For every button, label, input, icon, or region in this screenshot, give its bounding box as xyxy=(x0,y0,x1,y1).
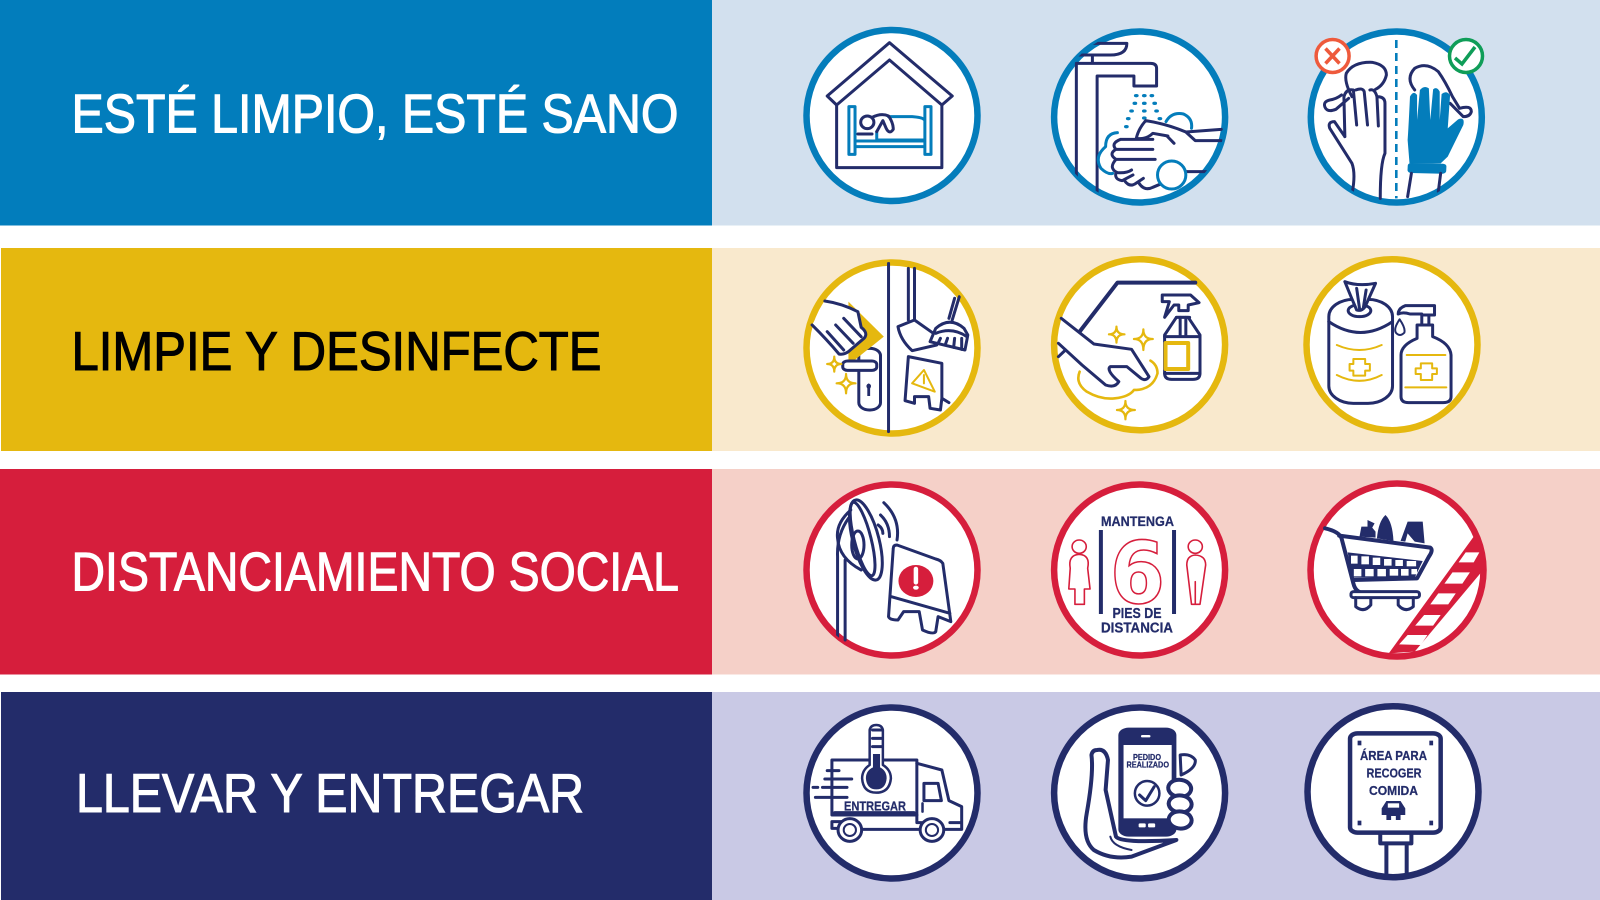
band: blue heading background xyxy=(0,0,712,226)
icon: loudspeaker and warning sign xyxy=(806,484,978,656)
label: mantenga: MANTENGA xyxy=(1101,513,1174,529)
icon: hand washing at tap xyxy=(1054,32,1225,202)
icon: keep six feet apart xyxy=(1054,484,1225,656)
icon: wiping a surface with spray bottle xyxy=(1054,259,1225,430)
band: gold heading background xyxy=(1,248,712,451)
band: pale indigo icon background xyxy=(712,692,1600,900)
heading: distanciamiento social: DISTANCIAMIENTO SOCIAL xyxy=(72,541,679,603)
icon: sick person in bed at home xyxy=(806,30,978,201)
label: area para: ÁREA PARA xyxy=(1360,748,1428,763)
icon: wipes and hand sanitizer xyxy=(1306,259,1478,430)
heading: este limpio: ESTÉ LIMPIO, ESTÉ SANO xyxy=(72,82,678,144)
band: pale red icon background xyxy=(712,469,1600,674)
icon: red cross badge xyxy=(1316,40,1349,72)
big outlined number six: 6 xyxy=(1110,524,1165,624)
icon: food pickup area sign xyxy=(1308,706,1478,880)
panel: distanciamiento social xyxy=(0,469,1600,674)
icon: gloves when handling raw chicken xyxy=(1311,32,1482,202)
icon: green check badge xyxy=(1450,40,1482,72)
panel: llevar y entregar xyxy=(1,692,1600,900)
icon: door handle and cleaning tools xyxy=(806,262,978,434)
band: navy heading background xyxy=(1,692,712,900)
label: pies de: PIES DE xyxy=(1112,606,1162,622)
icon: shopping cart behind barrier tape xyxy=(1310,484,1490,656)
label: recoger: RECOGER xyxy=(1366,765,1422,780)
label: distancia: DISTANCIA xyxy=(1101,621,1173,637)
icon: delivery truck with thermometer xyxy=(806,708,978,878)
heading: limpie y desinfecte: LIMPIE Y DESINFECTE xyxy=(72,320,602,382)
icon: phone with order placed xyxy=(1054,708,1225,878)
band: red heading background xyxy=(0,469,712,674)
label: comida: COMIDA xyxy=(1369,783,1419,798)
band: pale blue icon background xyxy=(712,0,1600,226)
label: pedido: PEDIDO xyxy=(1133,752,1161,762)
panel: este limpio xyxy=(0,0,1600,226)
heading: llevar y entregar: LLEVAR Y ENTREGAR xyxy=(76,762,584,824)
band: pale gold icon background xyxy=(712,248,1600,451)
label: entregar: ENTREGAR xyxy=(844,799,906,813)
label: realizado: REALIZADO xyxy=(1126,760,1169,770)
panel: limpie y desinfecte xyxy=(1,248,1600,451)
